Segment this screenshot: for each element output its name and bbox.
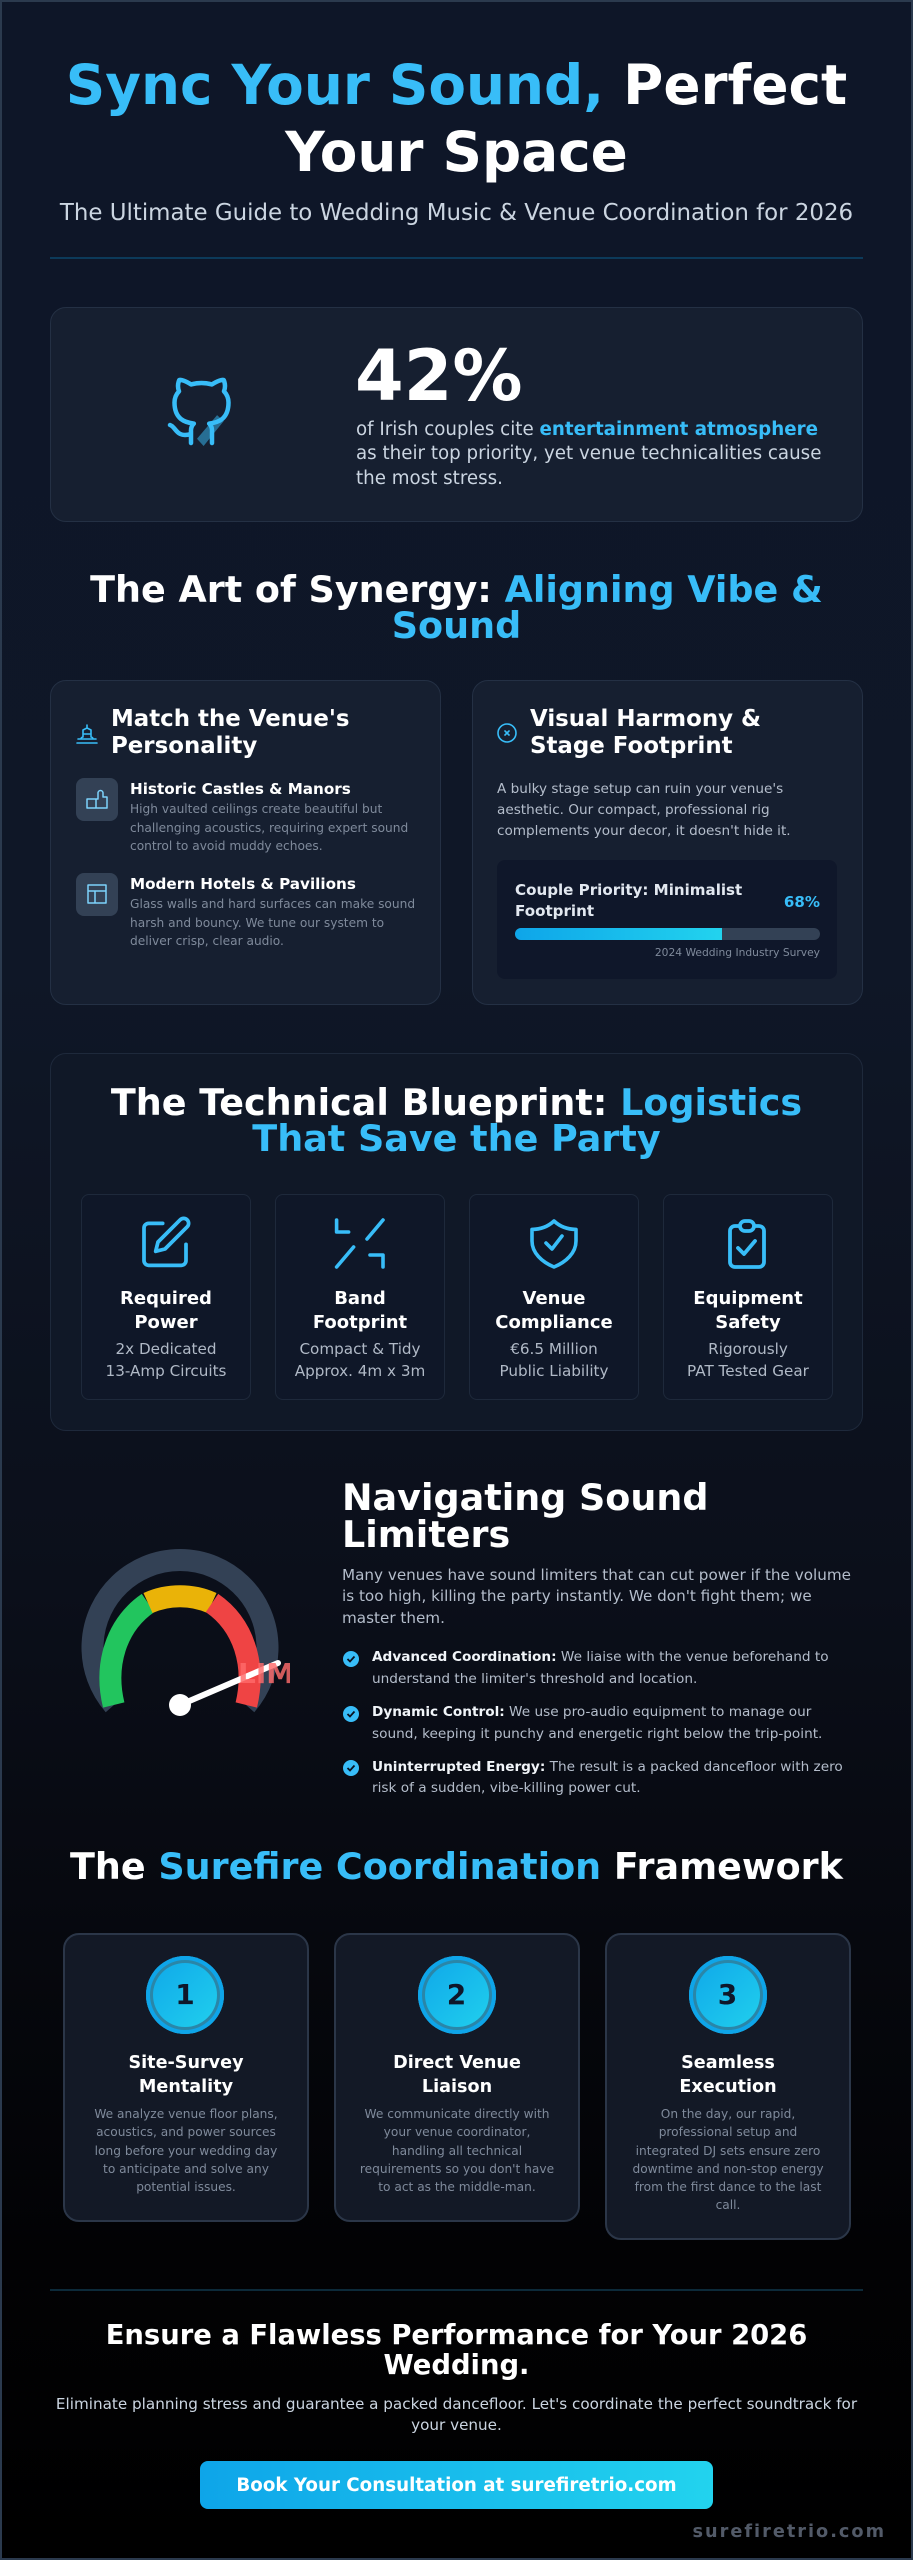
compliance title: Venue [522, 1288, 586, 1309]
limiters text: master them. [342, 1609, 445, 1627]
heading: framework: The Surefire Coordination Framework [70, 1844, 843, 1888]
compliance title: Compliance [495, 1312, 613, 1333]
progress source: 2024 Wedding Industry Survey [655, 946, 820, 959]
icon: circle x [497, 723, 517, 743]
cta text: your venue. [411, 2416, 502, 2434]
header divider [50, 257, 863, 259]
cta heading: Wedding. [384, 2350, 529, 2381]
step 3 text: integrated DJ sets ensure zero [636, 2144, 820, 2158]
visual harmony text [497, 780, 791, 839]
cta heading: Ensure a Flawless Performance for Your 2026 [106, 2320, 807, 2351]
step 3 text: call. [716, 2198, 740, 2212]
heading: technical blueprint: The Technical Blueprint: Logistics [111, 1081, 802, 1124]
step 1 title: Mentality [139, 2077, 233, 2097]
heading: art of synergy [90, 568, 823, 647]
castles text: High vaulted ceilings create beautiful but [130, 802, 382, 816]
icon: check 2 [343, 1706, 359, 1722]
step 1 text: potential issues. [136, 2180, 236, 2194]
progress label: Footprint [515, 902, 594, 920]
icon: pencil square [142, 1216, 190, 1268]
step number 1 [146, 1956, 224, 2034]
power title [120, 1288, 212, 1333]
step card 2 [334, 1933, 580, 2222]
step 2 text [334, 2105, 580, 2196]
icon: castle [86, 790, 108, 809]
compliance text [499, 1340, 608, 1380]
progress label [515, 881, 742, 920]
compliance text: €6.5 Million [510, 1340, 598, 1358]
step card 1 [63, 1933, 309, 2222]
step 3 text: downtime and non-stop energy [632, 2162, 824, 2176]
step 3 title [605, 2051, 851, 2100]
castles text: control to avoid muddy echoes. [130, 839, 323, 853]
compliance text: Public Liability [499, 1362, 608, 1380]
watermark: surefiretrio.com [692, 2522, 886, 2542]
step number 3 [688, 1956, 766, 2034]
title [66, 52, 847, 184]
visual harmony text: aesthetic. Our compact, professional rig [497, 802, 770, 818]
step 3 title: Seamless [681, 2053, 775, 2073]
subtitle: The Ultimate Guide to Wedding Music & Venue Coordination for 2026 [60, 200, 853, 226]
step 2 title: Direct Venue [393, 2053, 521, 2073]
chart: sound limiter gauge [82, 1549, 290, 1716]
heading: technical blueprint [111, 1081, 802, 1160]
cta button [200, 2461, 713, 2509]
stat text [356, 419, 821, 489]
step 2 text: handling all technical [392, 2144, 522, 2158]
visual harmony text: A bulky stage setup can ruin your venue's [497, 780, 783, 796]
step 1 text: long before your wedding day [95, 2144, 277, 2158]
card heading: match the venue: Match the Venue's [111, 706, 349, 732]
heading: art of synergy: The Art of Synergy: Aligning Vibe & [90, 568, 823, 611]
castles text: challenging acoustics, requiring expert sound [130, 821, 408, 835]
heading: sound limiters: Navigating Sound [342, 1476, 708, 1519]
spec card: safety [663, 1194, 833, 1400]
card heading: match the venue: Personality [111, 733, 257, 759]
list item 2 [372, 1704, 822, 1742]
step 1 title [128, 2053, 244, 2097]
list item 2: sound, keeping it punchy and energetic right below the trip-point. [372, 1726, 822, 1742]
icon box: castle [76, 778, 118, 821]
safety title: Safety [715, 1312, 781, 1333]
icon: compress arrows [334, 1218, 385, 1269]
spec card: footprint [275, 1194, 445, 1400]
panel: 42% stat [50, 307, 863, 522]
card heading: visual harmony: Stage Footprint [530, 733, 733, 759]
hotels text: Glass walls and hard surfaces can make sound [130, 897, 415, 911]
progress label: Couple Priority: Minimalist [515, 881, 742, 899]
icon box: hotel [76, 873, 118, 916]
step 1 text: to anticipate and solve any [103, 2162, 269, 2176]
cta text: Eliminate planning stress and guarantee a packed dancefloor. Let's coordinate the perfect soundtrack for [56, 2395, 857, 2413]
list item 1: understand the limiter's threshold and location. [372, 1670, 697, 1686]
icon: clipboard check [728, 1219, 766, 1269]
safety title: Equipment [693, 1288, 803, 1309]
icon: check 1 [343, 1651, 359, 1667]
progress bar [515, 928, 820, 940]
visual harmony text: complements your decor, it doesn't hide it. [497, 823, 791, 839]
list item 3 [372, 1758, 843, 1796]
cta heading [0, 2321, 913, 2381]
title: Your Space [285, 120, 628, 184]
step 2 text: to act as the middle-man. [378, 2180, 536, 2194]
step 2 text: your venue coordinator, [384, 2125, 530, 2139]
step 2 title [393, 2053, 521, 2097]
heading: technical blueprint: That Save the Party [252, 1117, 661, 1160]
step 1 text: acoustics, and power sources [96, 2125, 276, 2139]
heading: sound limiters [342, 1476, 708, 1556]
progress value: 68% [784, 892, 820, 910]
list item 1: Advanced Coordination: We liaise with the venue beforehand to [372, 1649, 829, 1665]
castles title: Historic Castles & Manors [130, 780, 351, 798]
safety text [687, 1340, 809, 1380]
card heading: visual harmony: Visual Harmony & [530, 706, 761, 732]
limiters text: Many venues have sound limiters that can cut power if the volume [342, 1566, 851, 1584]
step 3 text: from the first dance to the last [635, 2180, 821, 2194]
power title: Required [120, 1288, 212, 1309]
power text: 13-Amp Circuits [106, 1362, 226, 1380]
icon: check 3 [343, 1760, 359, 1776]
panel: visual harmony [472, 680, 863, 1005]
spec card: compliance [469, 1194, 639, 1400]
stat text: of Irish couples cite entertainment atmosphere [356, 419, 818, 440]
step card 3 [605, 1933, 851, 2240]
title: Sync Your Sound, Perfect [66, 52, 847, 116]
castles text [130, 802, 408, 853]
hotels text: harsh and bouncy. We tune our system to [130, 916, 384, 930]
icon: cat outline [168, 378, 231, 446]
icon: hotel [87, 884, 107, 904]
cta text [0, 2394, 913, 2436]
list item 3: risk of a sudden, vibe-killing power cut. [372, 1780, 641, 1796]
step number 2: 2 [447, 1978, 466, 2011]
hotels text: deliver crisp, clear audio. [130, 934, 284, 948]
step 1 text: We analyze venue floor plans, [94, 2107, 278, 2121]
hotels title: Modern Hotels & Pavilions [130, 875, 356, 893]
limiters text: is too high, killing the party instantly. We don't fight them; we [342, 1587, 812, 1605]
step 3 text: professional setup and [659, 2125, 797, 2139]
progress panel [497, 860, 837, 979]
step 2 title: Liaison [422, 2077, 492, 2097]
hotels text [130, 897, 415, 948]
step 3 text: On the day, our rapid, [661, 2107, 795, 2121]
heading: art of synergy: Sound [392, 604, 521, 647]
footprint text: Approx. 4m x 3m [295, 1362, 425, 1380]
limiters text [342, 1566, 851, 1627]
safety title [693, 1288, 803, 1333]
card heading: match the venue [111, 706, 349, 759]
power text [106, 1340, 226, 1380]
step 1 text [94, 2107, 278, 2194]
card heading: visual harmony [530, 706, 761, 759]
step 2 text: We communicate directly with [365, 2107, 549, 2121]
step number 2 [418, 1956, 496, 2034]
safety text: PAT Tested Gear [687, 1362, 809, 1380]
step 3 title: Execution [679, 2077, 777, 2097]
step 2 text: requirements so you don't have [360, 2162, 554, 2176]
step number 1: 1 [175, 1978, 195, 2011]
list item 2: Dynamic Control: We use pro-audio equipment to manage our [372, 1704, 811, 1720]
stat number: 42% [355, 335, 523, 417]
step number 3: 3 [718, 1978, 737, 2011]
footprint title [313, 1288, 407, 1333]
step 3 text [605, 2105, 851, 2214]
heading: sound limiters: Limiters [342, 1512, 510, 1556]
power text: 2x Dedicated [116, 1340, 216, 1358]
compliance title [495, 1288, 613, 1333]
footprint text [294, 1340, 425, 1380]
footprint title: Band [334, 1288, 386, 1309]
panel: match the venue [50, 680, 441, 1005]
step 1 title: Site-Survey [128, 2053, 244, 2073]
stat text: the most stress. [356, 468, 503, 489]
list item 1 [372, 1649, 829, 1686]
cta button: Book Your Consultation at surefiretrio.com [236, 2475, 677, 2496]
power title: Power [134, 1312, 198, 1333]
panel: technical blueprint [50, 1053, 863, 1431]
safety text: Rigorously [708, 1340, 788, 1358]
footer divider [50, 2289, 863, 2291]
footprint title: Footprint [313, 1312, 407, 1333]
footprint text: Compact & Tidy [299, 1340, 421, 1358]
icon: venue [76, 724, 98, 744]
stat text: as their top priority, yet venue technicalities cause [356, 443, 821, 464]
icon: shield check [530, 1219, 578, 1269]
list item 3: Uninterrupted Energy: The result is a packed dancefloor with zero [372, 1758, 843, 1774]
spec card: power [81, 1194, 251, 1400]
